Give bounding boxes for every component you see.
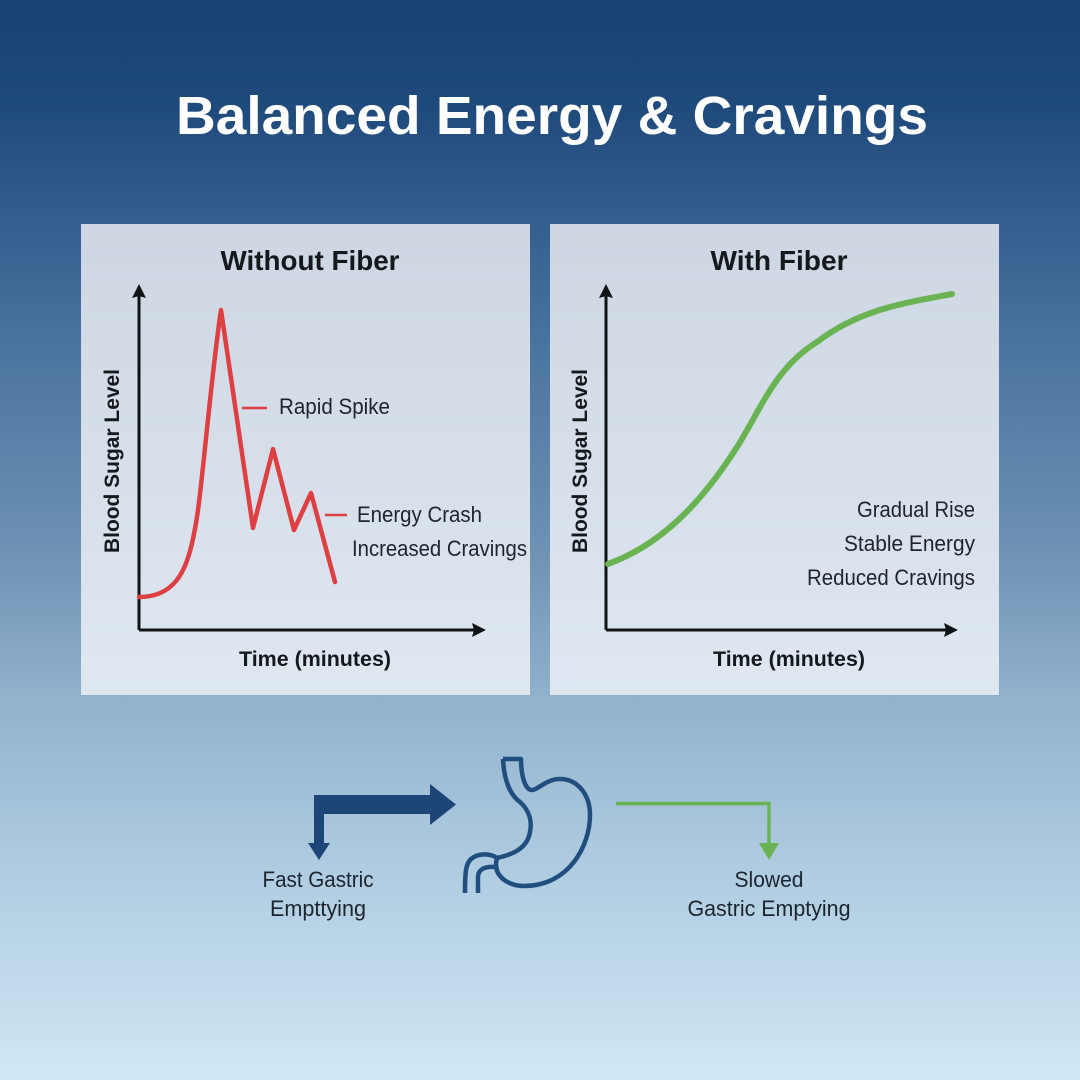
panel: without fiber — [81, 224, 530, 695]
label: fast gastric emptying: Fast Gastric — [262, 867, 374, 892]
label: gradual rise: Gradual Rise — [857, 497, 975, 522]
label: slowed gastric emptying: Slowed — [734, 867, 804, 892]
label: fast gastric emptying: Empttying — [270, 896, 366, 921]
arrow: fast gastric emptying — [308, 784, 456, 860]
label: slowed gastric emptying — [688, 867, 850, 921]
x-axis label: Time (minutes) — [713, 648, 865, 671]
label: slowed gastric emptying: Gastric Emptying — [688, 896, 850, 921]
arrow: slowed gastric emptying — [616, 804, 779, 860]
x-axis label: Time (minutes) — [239, 648, 391, 671]
chart axes: with fiber — [599, 284, 958, 637]
panel: with fiber — [550, 224, 999, 695]
callout: rapid spike: Rapid Spike — [279, 394, 390, 419]
heading: without fiber: Without Fiber — [220, 245, 400, 276]
callout: energy crash: Energy Crash — [357, 502, 482, 527]
chart axes: without fiber — [132, 284, 486, 637]
label: stable energy: Stable Energy — [844, 531, 975, 556]
y-axis label: Blood Sugar Level — [569, 369, 592, 553]
icon: stomach — [465, 759, 590, 893]
line: gradual rise — [608, 294, 952, 564]
line: blood sugar spike — [139, 310, 335, 597]
label: fast gastric emptying — [262, 867, 374, 921]
label: reduced cravings: Reduced Cravings — [807, 565, 975, 590]
label: increased cravings: Increased Cravings — [352, 536, 527, 561]
heading: with fiber: With Fiber — [710, 245, 848, 276]
y-axis label: Blood Sugar Level — [101, 369, 124, 553]
title: Balanced Energy & Cravings — [176, 86, 928, 146]
